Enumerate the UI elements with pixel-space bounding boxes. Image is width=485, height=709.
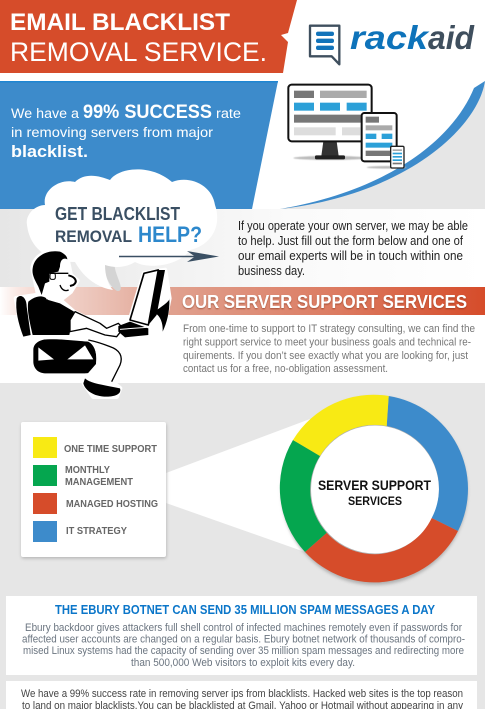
panel: success rate [0, 81, 278, 209]
panel: success rate details [6, 681, 477, 709]
success rate text: blacklist. [11, 142, 88, 161]
white outline [16, 251, 169, 397]
legend: one time support [33, 437, 157, 458]
bubble heading: HELP? [138, 222, 202, 247]
legend: monthly management [33, 465, 133, 488]
title: EMAIL BLACKLIST [10, 9, 230, 36]
text block: help [238, 218, 468, 278]
arm [70, 312, 123, 337]
segment: one time support [293, 395, 389, 456]
legend: monthly management: MONTHLY [65, 465, 110, 476]
illustration: man at laptop [16, 251, 169, 397]
bubble heading: REMOVAL [55, 227, 132, 246]
text block: services intro: contact us for a free, no-obligation assessment. [183, 363, 388, 375]
chair seat [33, 339, 96, 373]
arrow [119, 251, 219, 262]
beam from legend to donut [166, 419, 330, 552]
logo: rackaid: aid [428, 19, 475, 56]
chair back [16, 296, 31, 337]
legend: managed hosting [33, 493, 158, 514]
header banner [0, 0, 297, 73]
head [38, 260, 77, 299]
logo: rackaid: rack [350, 19, 430, 56]
legend: monthly management: MANAGEMENT [65, 477, 133, 488]
panel: ebury botnet: THE EBURY BOTNET CAN SEND 35 MILLION SPAM MESSAGES A DAY [55, 603, 436, 617]
legend: managed hosting: MANAGED HOSTING [66, 499, 158, 510]
band: our server support services [0, 287, 485, 315]
segment: it strategy [387, 396, 468, 531]
text block: services intro [183, 323, 475, 375]
donut label: SERVICES [348, 496, 402, 508]
donut chart [280, 395, 468, 585]
title: REMOVAL SERVICE. [10, 37, 267, 67]
success rate text: in removing servers from major [11, 124, 213, 140]
shirt [28, 296, 74, 335]
legend: one time support: ONE TIME SUPPORT [64, 444, 157, 455]
ebury text: than 500,000 Web visitors to exploit kits every day. [131, 657, 355, 669]
icon: responsive devices [288, 85, 407, 169]
segment: monthly management [280, 440, 327, 552]
success rate text: 99% SUCCESS [83, 102, 212, 123]
legend: it strategy: IT STRATEGY [66, 526, 127, 537]
logo: rackaid [310, 19, 475, 64]
legend panel [21, 422, 166, 558]
laptop [155, 298, 169, 332]
donut label: SERVER SUPPORT [318, 477, 431, 493]
text block: help: business day. [238, 263, 305, 278]
speech bubble [27, 169, 217, 291]
leg [38, 335, 121, 387]
text block: help: our email experts will be in touch within one [238, 248, 463, 263]
donut label [318, 477, 431, 508]
success rate text: We have a [11, 106, 80, 121]
grey corner with blue swoosh [280, 81, 485, 209]
segment: managed hosting [305, 518, 458, 582]
success rate text [11, 102, 241, 161]
title [10, 9, 267, 67]
legend: it strategy [33, 521, 127, 542]
bubble heading [55, 204, 202, 247]
panel: ebury botnet [6, 596, 477, 675]
ebury text [22, 622, 465, 669]
shoe [83, 378, 120, 397]
success rate text: rate [216, 106, 241, 121]
bubble heading: GET BLACKLIST [55, 204, 180, 224]
